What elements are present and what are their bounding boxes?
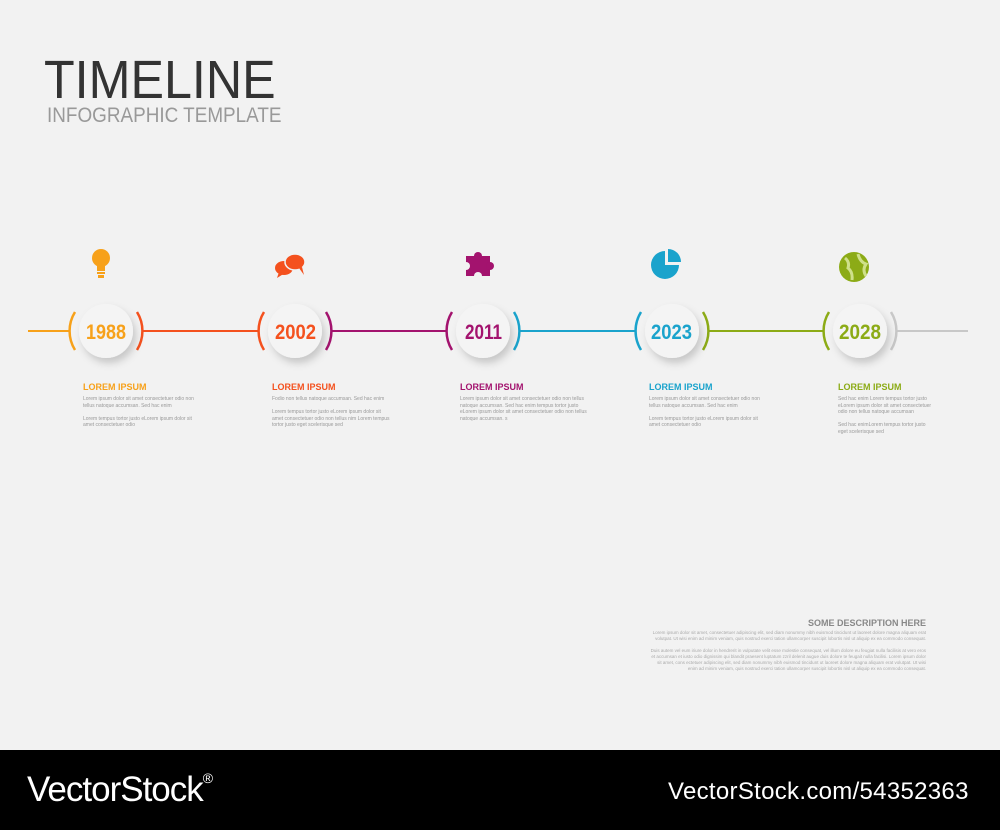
text block 2023: Lorem tempus tortor justo eLorem ipsum dolor sit amet consectetuer odio — [649, 416, 758, 428]
description block: Duis autem vel eum iriure dolor in hendrerit in vulputate velit esse molestie consequat, vel illum dolore eu feugiat nulla facilisis at vero eros et accumsan et iusto odio dignissim qui blandit praesent luptatum zzril delenit augue duis dolore te feugait nulla facilisi. Lorem ipsum dolor sit amet, cons ectetuer adipiscing elit, sed diam nonummy nibh euismod tincidunt ut laoreet dolore magna aliquam erat volutpat. Ut wisi enim ad minim veniam, quis nostrud exerci tation ullamcorper suscipit lobortis nisl ut aliquip ex ea commodo consequat. — [651, 648, 926, 671]
text block 1988: Lorem ipsum dolor sit amet consectetuer odio non tellus natoque accumsan. Sed hac enim — [83, 396, 194, 408]
text block 1988: Lorem tempus tortor justo eLorem ipsum dolor sit amet consectetuer odio — [83, 416, 192, 428]
text block 1988: LOREM IPSUM — [83, 382, 147, 392]
text block 2028: Sed hac enim Lorem tempus tortor justo eLorem ipsum dolor sit amet consectetuer odio non tellus natoque accumsan — [838, 396, 931, 415]
text block 2011: Lorem ipsum dolor sit amet consectetuer odio non tellus natoque accumsan. Sed hac enim tempus tortor justo eLorem ipsum dolor sit amet consectetuer odio non tellus natoque accumsan. s — [460, 396, 587, 422]
text block 2023: Lorem ipsum dolor sit amet consectetuer odio non tellus natoque accumsan. Sed hac enim — [649, 396, 760, 408]
footer url: VectorStock.com/54352363 — [668, 778, 969, 805]
text block 2002 — [272, 382, 390, 428]
milestone 2002: 2002 — [275, 321, 316, 344]
milestone 1988 — [70, 304, 142, 358]
milestone 2011: 2011 — [465, 321, 502, 344]
text block 2028: LOREM IPSUM — [838, 382, 902, 392]
description block: Lorem ipsum dolor sit amet, consectetuer adipiscing elit, sed diam nonummy nibh euismod tincidunt ut laoreet dolore magna aliquam erat volutpat. Ut wisi enim ad minim veniam, quis nostrud exerci tation ullamcorper suscipit lobortis nisl ut aliquip ex ea commodo consequat. — [653, 630, 926, 641]
text block 2002: Lorem tempus tortor justo eLorem ipsum dolor sit amet consectetuer odio non tellus nim Lorem tempus tortor justo eget scelerisque sed — [272, 409, 390, 428]
milestone 2023: 2023 — [651, 321, 692, 344]
text block 2023 — [649, 382, 760, 428]
milestone 2011 — [447, 304, 519, 358]
milestone 1988: 1988 — [86, 321, 126, 344]
icon: globe — [839, 252, 869, 282]
milestone 2028: 2028 — [839, 321, 881, 344]
icon: light bulb — [92, 249, 110, 278]
footer logo: VectorStock® — [27, 770, 212, 809]
text block 2028: Sed hac enimLorem tempus tortor justo eget scelerisque sed — [838, 422, 926, 434]
description block — [651, 618, 926, 671]
milestone 2002 — [259, 304, 331, 358]
text block 2023: LOREM IPSUM — [649, 382, 713, 392]
icon: pie chart — [651, 249, 681, 279]
title: TIMELINE — [44, 50, 276, 110]
subtitle: INFOGRAPHIC TEMPLATE — [47, 104, 282, 127]
text block 2002: LOREM IPSUM — [272, 382, 336, 392]
icon: speech bubbles — [275, 254, 305, 278]
text block 2002: Fodio non tellus natoque accumsan. Sed hac enim — [272, 396, 384, 402]
text block 2011: LOREM IPSUM — [460, 382, 524, 392]
milestone 2028 — [824, 304, 896, 358]
milestone 2023 — [636, 304, 708, 358]
footer banner — [0, 750, 1000, 830]
icon: puzzle — [462, 252, 494, 280]
text block 2028 — [838, 382, 931, 434]
description block: SOME DESCRIPTION HERE — [808, 618, 926, 628]
text block 1988 — [83, 382, 194, 428]
text block 2011 — [460, 382, 587, 422]
